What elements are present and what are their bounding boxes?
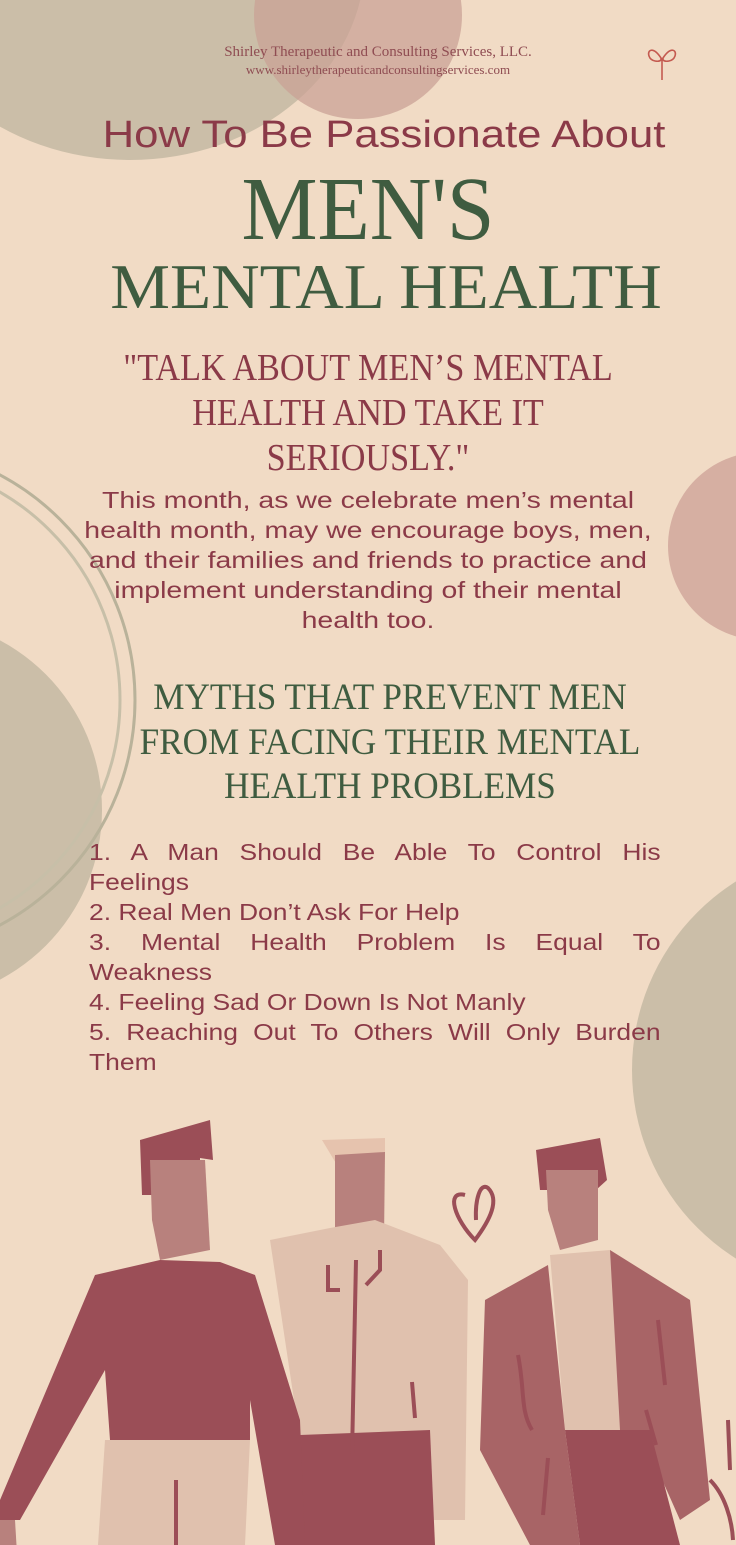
quote: SERIOUSLY."	[267, 437, 469, 479]
myths heading: FROM FACING THEIR MENTAL	[140, 722, 640, 762]
quote	[123, 347, 613, 479]
body text: and their families and friends to practice and	[89, 547, 647, 573]
header: company name: www.shirleytherapeuticandconsultingservices.com	[246, 62, 510, 77]
myths list	[89, 839, 661, 1075]
header: company name	[224, 44, 532, 77]
middle man	[270, 1138, 468, 1545]
icon: butterfly	[648, 49, 676, 80]
text: MEN'S	[242, 160, 494, 259]
illustration: three men	[0, 1120, 735, 1545]
myths heading	[140, 677, 640, 807]
title	[103, 114, 666, 322]
body text: This month, as we celebrate men’s mental	[102, 487, 634, 513]
header: company name: Shirley Therapeutic and Consulting Services, LLC.	[224, 44, 532, 60]
myths list: Them	[89, 1049, 157, 1075]
myths list: 5. Reaching Out To Others Will Only Burden	[89, 1019, 661, 1045]
left man	[0, 1120, 305, 1545]
body text: health too.	[302, 607, 434, 633]
body text: health month, may we encourage boys, men,	[84, 517, 652, 543]
myths list: 4. Feeling Sad Or Down Is Not Manly	[89, 989, 526, 1015]
body text	[84, 487, 652, 633]
myths list: Feelings	[89, 869, 189, 895]
myths heading: MYTHS THAT PREVENT MEN	[153, 677, 627, 718]
body text: implement understanding of their mental	[114, 577, 622, 603]
myths list: 1. A Man Should Be Able To Control His	[89, 839, 661, 865]
myths heading: HEALTH PROBLEMS	[224, 766, 556, 807]
text: MENTAL HEALTH	[110, 251, 662, 322]
myths list: 2. Real Men Don’t Ask For Help	[89, 899, 459, 925]
text: How To Be Passionate About	[103, 114, 665, 156]
quote: "TALK ABOUT MEN’S MENTAL	[123, 347, 613, 389]
right man	[480, 1138, 733, 1545]
myths list: 3. Mental Health Problem Is Equal To	[89, 929, 661, 955]
myths list: Weakness	[89, 959, 212, 985]
quote: HEALTH AND TAKE IT	[192, 392, 544, 434]
icon: heart doodle	[454, 1187, 493, 1240]
